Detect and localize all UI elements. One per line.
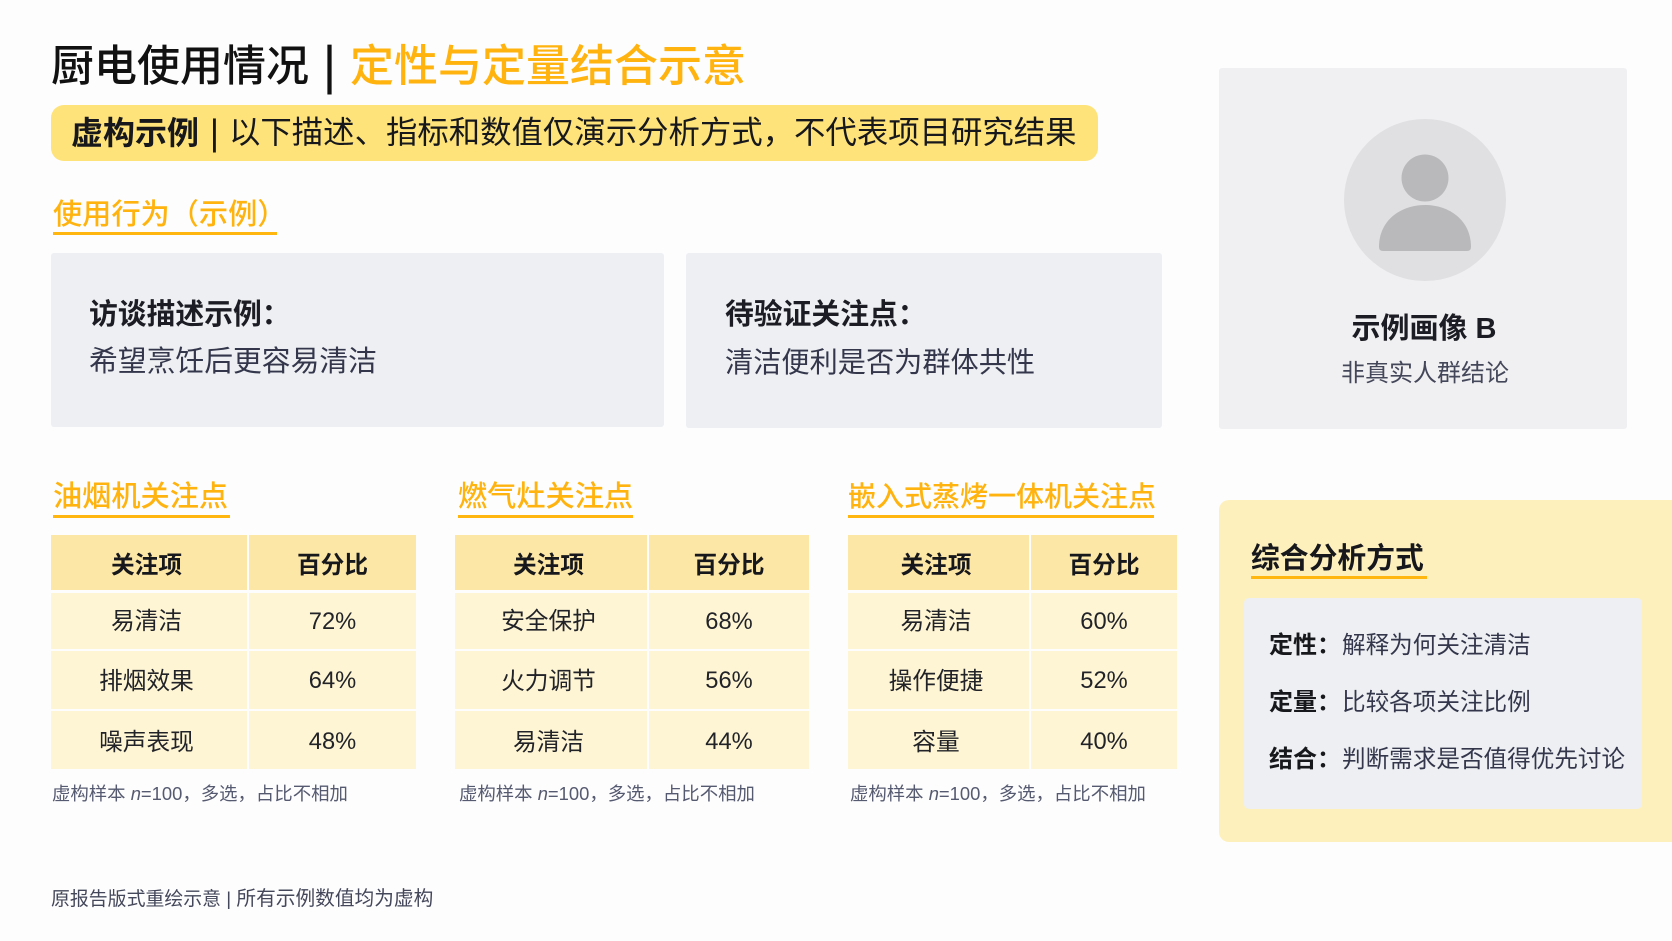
heading: range hood: 油烟机关注点 bbox=[53, 481, 228, 513]
interview text: 希望烹饪后更容易清洁 bbox=[89, 346, 377, 378]
header row: 关注项 bbox=[111, 552, 182, 578]
row: flame control: 火力调节 bbox=[501, 668, 596, 694]
note: range hood sample: 虚构样本 n=100，多选，占比不相加 bbox=[52, 783, 348, 804]
icon: persona avatar bbox=[1344, 119, 1506, 281]
row: capacity: 容量 bbox=[912, 730, 960, 756]
interview heading: 访谈描述示例： bbox=[89, 299, 291, 331]
header row: 百分比 bbox=[693, 552, 765, 578]
row: ease of operation: 操作便捷 bbox=[889, 668, 983, 694]
panel: combined analysis bbox=[1219, 500, 1672, 842]
item: quantitative: 定量： bbox=[1269, 689, 1341, 716]
row: noise: 48% bbox=[309, 729, 356, 755]
title: separator: | bbox=[323, 31, 336, 95]
row: easy cleaning bbox=[455, 711, 809, 769]
table: range hood bbox=[51, 535, 416, 769]
row: easy cleaning bbox=[848, 593, 1177, 649]
row: easy cleaning: 60% bbox=[1080, 608, 1128, 634]
banner text: 以下描述、指标和数值仅演示分析方式，不代表项目研究结果 bbox=[229, 115, 1077, 150]
row: easy cleaning: 易清洁 bbox=[111, 609, 182, 635]
row: ease of operation bbox=[848, 651, 1177, 709]
header row bbox=[51, 535, 416, 590]
item: qualitative: 定性： bbox=[1269, 632, 1341, 659]
item: combined: 判断需求是否值得优先讨论 bbox=[1342, 747, 1625, 773]
note: gas stove sample: 虚构样本 n=100，多选，占比不相加 bbox=[459, 783, 755, 804]
verify heading: 待验证关注点： bbox=[725, 299, 927, 331]
title bbox=[51, 31, 746, 95]
row: capacity bbox=[848, 711, 1177, 769]
heading: usage behaviour: 使用行为（示例） bbox=[53, 199, 286, 231]
persona name: 示例画像 B bbox=[1351, 313, 1496, 345]
row: easy cleaning: 易清洁 bbox=[900, 609, 972, 635]
title: gold part: 定性与定量结合示意 bbox=[350, 42, 746, 91]
panel heading: 综合分析方式 bbox=[1251, 543, 1424, 575]
row: safety: 68% bbox=[705, 608, 753, 634]
row: safety: 安全保护 bbox=[501, 609, 596, 635]
note: steam oven sample: 虚构样本 n=100，多选，占比不相加 bbox=[850, 783, 1146, 804]
header row bbox=[848, 535, 1177, 590]
panel: interview description bbox=[51, 253, 664, 427]
footer: 原报告版式重绘示意 | 所有示例数值均为虚构 bbox=[51, 888, 433, 910]
item: quantitative bbox=[1269, 689, 1531, 716]
row: ease of operation: 52% bbox=[1080, 668, 1128, 694]
persona caption: 非真实人群结论 bbox=[1341, 360, 1509, 387]
banner separator: | bbox=[210, 109, 219, 153]
header row: 百分比 bbox=[297, 552, 368, 578]
row: safety bbox=[455, 593, 809, 649]
title: main part: 厨电使用情况 bbox=[51, 43, 309, 91]
disclaimer banner bbox=[51, 105, 1098, 161]
table: built-in steam oven bbox=[848, 535, 1177, 769]
item: combined: 结合： bbox=[1269, 746, 1341, 773]
row: smoke extraction bbox=[51, 651, 416, 709]
row: easy cleaning: 72% bbox=[309, 608, 356, 634]
banner label: 虚构示例 bbox=[71, 115, 199, 151]
heading: gas stove: 燃气灶关注点 bbox=[458, 481, 633, 513]
row: flame control bbox=[455, 651, 809, 709]
row: noise bbox=[51, 711, 416, 769]
inner list box bbox=[1244, 598, 1642, 809]
item: quantitative: 比较各项关注比例 bbox=[1342, 690, 1531, 716]
header row: 关注项 bbox=[900, 552, 972, 578]
row: smoke extraction: 64% bbox=[309, 668, 356, 694]
heading: built-in steam oven: 嵌入式蒸烤一体机关注点 bbox=[848, 481, 1156, 512]
panel: points to verify bbox=[686, 253, 1162, 428]
row: easy cleaning: 易清洁 bbox=[513, 730, 584, 756]
header row: 关注项 bbox=[513, 552, 584, 578]
row: flame control: 56% bbox=[705, 668, 753, 694]
item: qualitative bbox=[1269, 632, 1531, 659]
verify text: 清洁便利是否为群体共性 bbox=[725, 346, 1035, 378]
item: qualitative: 解释为何关注清洁 bbox=[1342, 633, 1531, 659]
row: capacity: 40% bbox=[1080, 729, 1128, 755]
header row bbox=[455, 535, 809, 590]
header row: 百分比 bbox=[1068, 552, 1140, 578]
table: gas stove bbox=[455, 535, 809, 769]
row: easy cleaning: 44% bbox=[705, 729, 753, 755]
row: noise: 噪声表现 bbox=[99, 730, 194, 756]
row: smoke extraction: 排烟效果 bbox=[99, 668, 194, 694]
panel: example persona bbox=[1219, 68, 1627, 429]
row: easy cleaning bbox=[51, 593, 416, 649]
